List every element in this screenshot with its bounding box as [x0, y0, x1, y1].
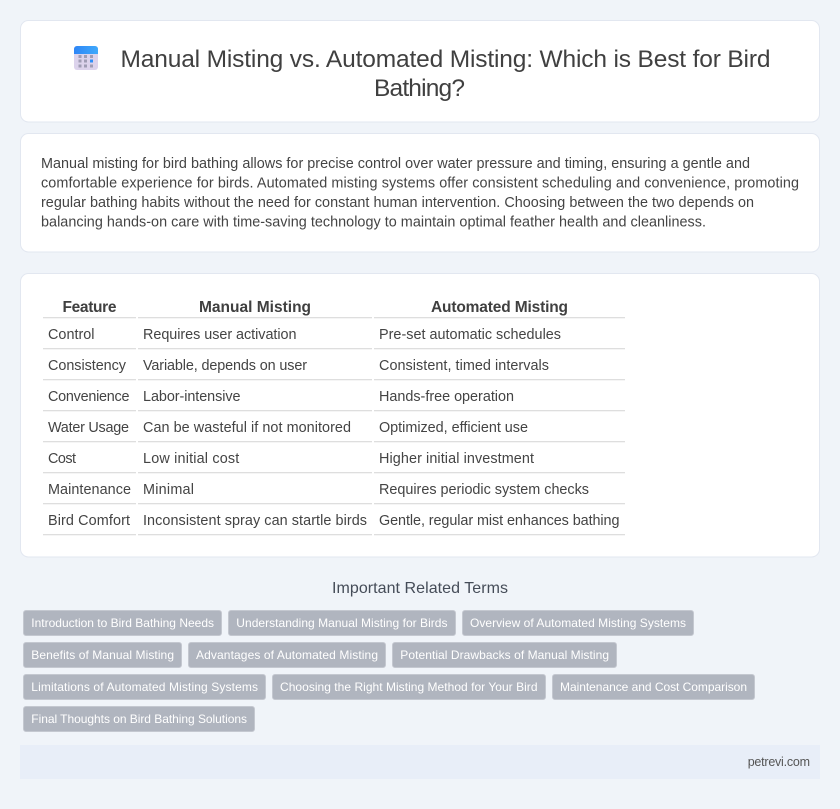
table row: control: Control	[48, 327, 94, 343]
text block: introduction paragraph	[41, 156, 799, 230]
tag: Overview of Automated Misting Systems	[470, 616, 686, 630]
table row: control: Pre-set automatic schedules	[379, 327, 561, 343]
text block: introduction paragraph: balancing hands-on care with time-saving technology to maintain optimal feather health and cleanliness.	[41, 214, 706, 230]
table row: bird comfort: Bird Comfort	[48, 513, 130, 529]
table row: cost: Low initial cost	[143, 451, 239, 467]
text block: introduction paragraph: comfortable experience for birds. Automated misting systems offer consistent scheduling and convenience, promoting	[41, 176, 799, 192]
tag	[552, 674, 754, 700]
text block: introduction paragraph: regular bathing habits without the need for constant human intervention. Choosing between the two depends on	[41, 195, 754, 211]
tag	[188, 642, 386, 668]
table header row: Automated Misting	[431, 299, 568, 316]
table row: water usage: Can be wasteful if not monitored	[143, 420, 351, 436]
table row: convenience: Hands-free operation	[379, 389, 514, 405]
tag: Final Thoughts on Bird Bathing Solutions	[31, 712, 247, 726]
table row: convenience: Convenience	[48, 389, 130, 405]
footer: petrevi.com	[748, 755, 810, 769]
table row: water usage: Optimized, efficient use	[379, 420, 528, 436]
tag	[392, 642, 616, 668]
tag	[24, 642, 182, 668]
title: Bathing?	[374, 75, 465, 102]
table row: water usage: Water Usage	[48, 420, 129, 436]
table row: control: Requires user activation	[143, 327, 296, 343]
table row: control	[43, 327, 625, 349]
tag: Benefits of Manual Misting	[31, 648, 174, 662]
tag	[24, 610, 222, 636]
table row: consistency: Variable, depends on user	[143, 358, 307, 374]
tag	[24, 706, 254, 732]
title: Manual Misting vs. Automated Misting: Which is Best for Bird	[120, 46, 770, 73]
footer	[20, 745, 820, 779]
tag	[24, 674, 266, 700]
table row: water usage	[43, 420, 625, 442]
panel: introduction	[20, 134, 820, 252]
tag: Understanding Manual Misting for Birds	[236, 616, 448, 630]
table row: bird comfort: Inconsistent spray can startle birds	[143, 513, 367, 529]
table row: consistency: Consistency	[48, 358, 127, 374]
tag: Limitations of Automated Misting Systems	[31, 680, 258, 694]
table row: cost: Cost	[48, 451, 76, 467]
tag	[272, 674, 546, 700]
table row: maintenance: Minimal	[143, 482, 194, 498]
tag	[462, 610, 694, 636]
table row: bird comfort	[43, 513, 625, 535]
tag: Advantages of Automated Misting	[196, 648, 378, 662]
table header row	[43, 299, 625, 318]
table row: maintenance: Requires periodic system checks	[379, 482, 589, 498]
table row: convenience	[43, 389, 625, 411]
heading: important related terms: Important Related Terms	[332, 580, 508, 597]
panel: related term tags	[24, 610, 754, 732]
table header row: Manual Misting	[199, 299, 311, 316]
table row: maintenance	[43, 482, 625, 504]
text block: introduction paragraph: Manual misting for bird bathing allows for precise control over water pressure and timing, ensuring a gentle and	[41, 156, 750, 172]
tag: Choosing the Right Misting Method for Your Bird	[280, 680, 538, 694]
table row: convenience: Labor-intensive	[143, 389, 240, 405]
panel: comparison table	[20, 274, 820, 557]
table header row: Feature	[62, 299, 117, 316]
table row: consistency: Consistent, timed intervals	[379, 358, 549, 374]
table row: maintenance: Maintenance	[48, 482, 131, 498]
panel: header	[20, 20, 820, 122]
icon: calendar	[74, 46, 98, 70]
title	[120, 46, 770, 102]
tag: Potential Drawbacks of Manual Misting	[400, 648, 609, 662]
table row: cost	[43, 451, 625, 473]
tag: Maintenance and Cost Comparison	[560, 680, 747, 694]
table row: cost: Higher initial investment	[379, 451, 534, 467]
tag	[228, 610, 456, 636]
table row: bird comfort: Gentle, regular mist enhances bathing	[379, 513, 620, 529]
tag: Introduction to Bird Bathing Needs	[31, 616, 214, 630]
table row: consistency	[43, 358, 625, 380]
